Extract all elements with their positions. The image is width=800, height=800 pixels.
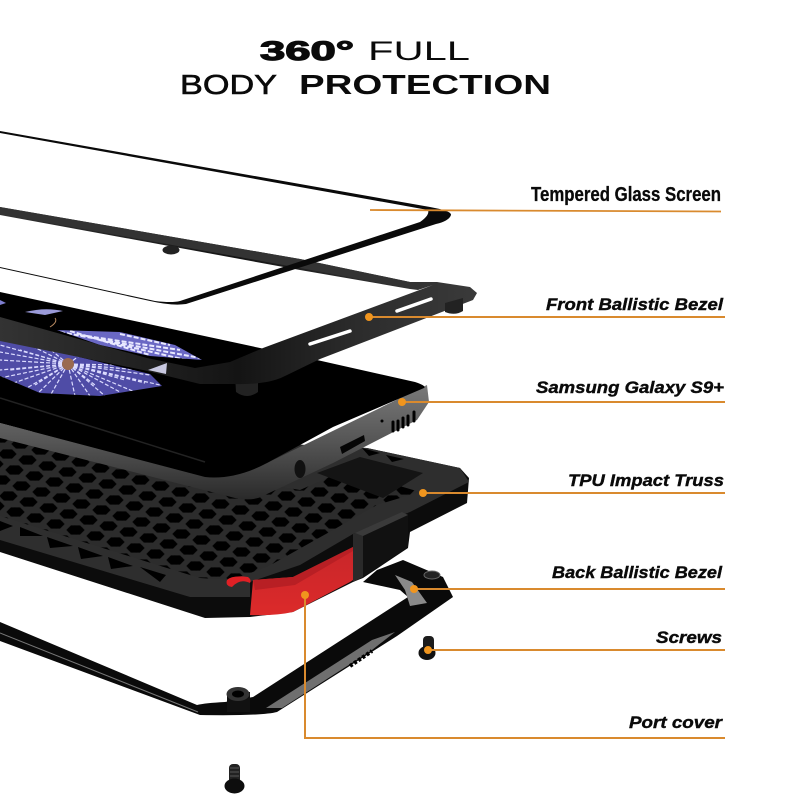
clip latch block [353, 512, 408, 582]
title line one [260, 36, 470, 66]
wallpaper lower [0, 341, 162, 396]
label: phone: Samsung Galaxy S9+ [536, 378, 724, 397]
title [180, 36, 551, 100]
USB port [340, 435, 365, 454]
red port clip [227, 547, 353, 615]
label: truss: TPU Impact Truss [568, 471, 724, 490]
tempered glass screen [0, 131, 451, 305]
honeycomb [0, 437, 420, 580]
component labels [531, 184, 724, 732]
triangle notch [148, 363, 167, 374]
title line one: 360° [260, 36, 354, 66]
front ballistic bezel [0, 207, 477, 396]
label: port cover: Port cover [629, 713, 724, 732]
case body [0, 430, 469, 618]
callout lines [305, 210, 725, 738]
callout line: back bezel [414, 588, 725, 590]
side wall triangles [0, 521, 166, 582]
audio jack [294, 460, 306, 478]
title line two [180, 69, 551, 100]
top surface [0, 430, 469, 597]
right peg [445, 298, 463, 314]
label: screws: Screws [656, 628, 722, 647]
bezel frame [0, 207, 477, 384]
phone body edge [0, 385, 429, 499]
title line two: BODY [180, 69, 277, 100]
bezel peg bottom [235, 375, 258, 396]
label: back bezel: Back Ballistic Bezel [552, 563, 723, 582]
label: front bezel: Front Ballistic Bezel [546, 295, 724, 314]
label: tempered glass: Tempered Glass Screen [531, 184, 721, 206]
Samsung Galaxy S9+ phone [0, 292, 429, 499]
wallpaper upper [57, 330, 202, 360]
icon: screw bottom [224, 764, 244, 794]
speaker grille [393, 412, 414, 431]
callout line: tempered glass [370, 210, 721, 212]
icon: screw right [418, 636, 436, 660]
callout line: screws [428, 649, 725, 651]
corner peg [226, 687, 250, 712]
back ballistic bezel frame [0, 560, 453, 715]
callout line: front bezel [369, 316, 725, 318]
slot one [310, 331, 350, 344]
tray recess [317, 457, 423, 498]
callout line: truss [423, 492, 725, 494]
centre peg [162, 246, 180, 254]
callout line: port cover [305, 595, 725, 738]
slot two [397, 299, 431, 311]
screen [0, 292, 425, 477]
title line two: PROTECTION [299, 69, 551, 100]
TPU impact truss [0, 430, 469, 618]
title line one: FULL [368, 36, 470, 66]
callout line: phone [402, 401, 725, 403]
callout dots [301, 313, 432, 654]
